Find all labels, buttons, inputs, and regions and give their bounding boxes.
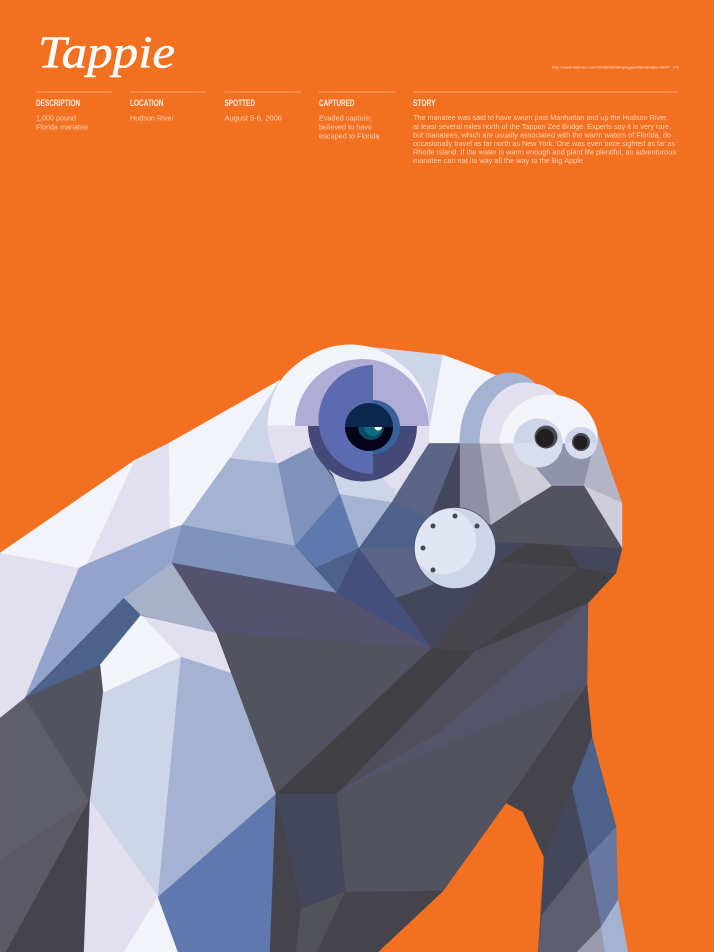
neck facets [278,443,622,648]
info column: captured: CAPTURED [319,97,355,108]
info column: story: STORY [413,97,436,108]
manatee illustration [0,345,628,952]
icon: snout eye large [514,418,562,468]
info column: description: DESCRIPTION [36,97,80,108]
info column: spotted [224,92,301,122]
info column: captured: escaped to Florida [319,132,380,140]
left flipper facets [0,657,276,952]
info column: story: but manatees, which are usually associated with the warm waters of Florida, do [413,130,671,139]
body underlay silhouette [0,345,628,952]
head top and snout [360,346,622,548]
title: Tappie [38,26,175,78]
info column: story: Rhode Island. If the water is warm enough and plant life plentiful, an adventurous [413,148,676,157]
info column: story: manatee can eat its way all the way to the Big Apple. [413,156,585,165]
info column: description: 1,000 pound [36,114,76,122]
right flipper facets [506,685,628,952]
info column: story [413,92,678,165]
icon: ear disc with dots [410,507,496,589]
info column: location: Hudson River [130,114,175,122]
info column: description: Florida manatee [36,122,88,132]
back and upper body facets [0,380,337,718]
info column: description [36,92,112,132]
info column: captured: believed to have [319,122,372,132]
info column: location [130,92,206,122]
info column: captured: Evaded capture; [319,114,372,122]
info column: location: LOCATION [130,97,164,108]
info column: captured [319,92,396,140]
info column: story: occasionally travel as far north as New York. One was even once sighted as far as [413,139,675,148]
info column: spotted: August 5-6, 2006 [224,114,282,122]
info column: spotted: SPOTTED [224,97,255,108]
source url: http://www.nytimes.com/2006/08/08/nyregion/08manatee.html?_r=0 [552,64,680,70]
icon: large eye socket and eye [268,345,429,502]
info column: story: The manatee was said to have swum past Manhattan and up the Hudson River, [413,113,668,122]
icon: snout eye small [565,427,597,459]
info column: story: at least several miles north of the Tappan Zee Bridge. Experts say it is very rare, [413,122,671,131]
belly and chest facets [172,543,616,952]
